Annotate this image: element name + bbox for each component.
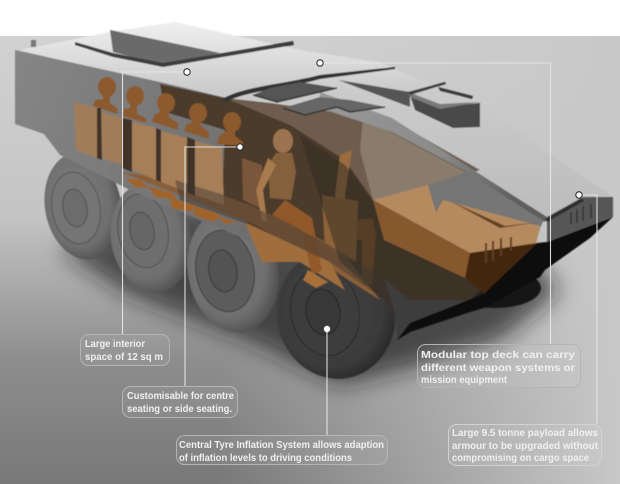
- callout: seating: [122, 386, 238, 418]
- wheel 2: [102, 177, 200, 299]
- callout: top deck: [418, 344, 580, 388]
- seated occupants: [93, 77, 376, 288]
- orange stowage blocks along floor: [125, 178, 250, 226]
- lower front plate grey: [385, 280, 465, 340]
- wheel 3: [178, 202, 288, 340]
- front plate vents: [570, 204, 592, 224]
- callout: payload: [448, 424, 602, 466]
- vehicle: [15, 22, 613, 388]
- grey glacis slope: [428, 172, 545, 228]
- callout: interior space: [80, 334, 170, 366]
- occupant 3: [152, 93, 178, 130]
- callout: interior space: Large interior: [85, 338, 145, 350]
- grey-tan roof window: [225, 98, 480, 200]
- seat 4: [161, 131, 187, 192]
- callout: payload: Large 9.5 tonne payload allows: [452, 427, 598, 439]
- front plate: [547, 197, 613, 242]
- seat 6: [242, 158, 264, 210]
- seat 3: [132, 122, 156, 180]
- wheels: [36, 146, 541, 388]
- callout: seating: seating or side seating.: [127, 403, 232, 415]
- occupant 2: [123, 86, 146, 123]
- nose cargo block: top face: [373, 185, 540, 253]
- seat 2: [101, 112, 122, 165]
- hatch on nose: [450, 201, 540, 228]
- callout: seating: Customisable for centre: [127, 390, 234, 402]
- occupant 4: [184, 103, 209, 139]
- callout: payload: compromising on cargo space: [452, 452, 589, 464]
- seats: [74, 102, 264, 210]
- wheel 1: [36, 146, 130, 266]
- callout dots: [184, 60, 582, 332]
- roof rail: [75, 41, 294, 67]
- callout leader lines: [122, 63, 597, 435]
- callout: payload: armour to be upgraded without: [452, 440, 598, 452]
- front wheel: [449, 268, 541, 308]
- seat box by front figure: [322, 195, 358, 262]
- small roof post: [31, 40, 36, 47]
- seat 1: [74, 102, 97, 158]
- callout: tyre inflation: [176, 436, 388, 464]
- translucent lower side armour: [300, 135, 483, 330]
- wheel 4: [267, 240, 405, 388]
- front figure: [335, 150, 376, 285]
- callout: top deck: different weapon systems or: [421, 362, 575, 374]
- callout: top deck: Modular top deck can carry: [421, 349, 575, 361]
- ground shadow: [60, 200, 560, 385]
- callout: tyre inflation: Central Tyre Inflation System allows adaption: [179, 439, 384, 451]
- black nose underside: [397, 217, 613, 340]
- seated figure: [256, 129, 328, 288]
- seat support dark uprights: [97, 108, 195, 196]
- turret mount: [338, 80, 480, 128]
- hull interior: [160, 84, 540, 330]
- sand-coloured cargo floor: [120, 172, 380, 300]
- glacis bevel: [320, 92, 547, 222]
- callout: tyre inflation: of inflation levels to driving conditions: [179, 452, 352, 464]
- callout: interior space: space of 12 sq m: [85, 351, 163, 363]
- callout: top deck: mission equipment: [421, 374, 507, 386]
- roof: [20, 22, 612, 218]
- seat 5: [195, 141, 224, 205]
- nose grille: [485, 237, 512, 263]
- occupant 5: [217, 112, 243, 146]
- rear side panel: [15, 50, 300, 250]
- occupant 1: [93, 77, 118, 114]
- roof panels: [222, 67, 395, 102]
- nose cargo block: side face: [373, 200, 470, 278]
- roof hatch: [110, 30, 220, 65]
- nose cargo block: front face: [465, 243, 537, 294]
